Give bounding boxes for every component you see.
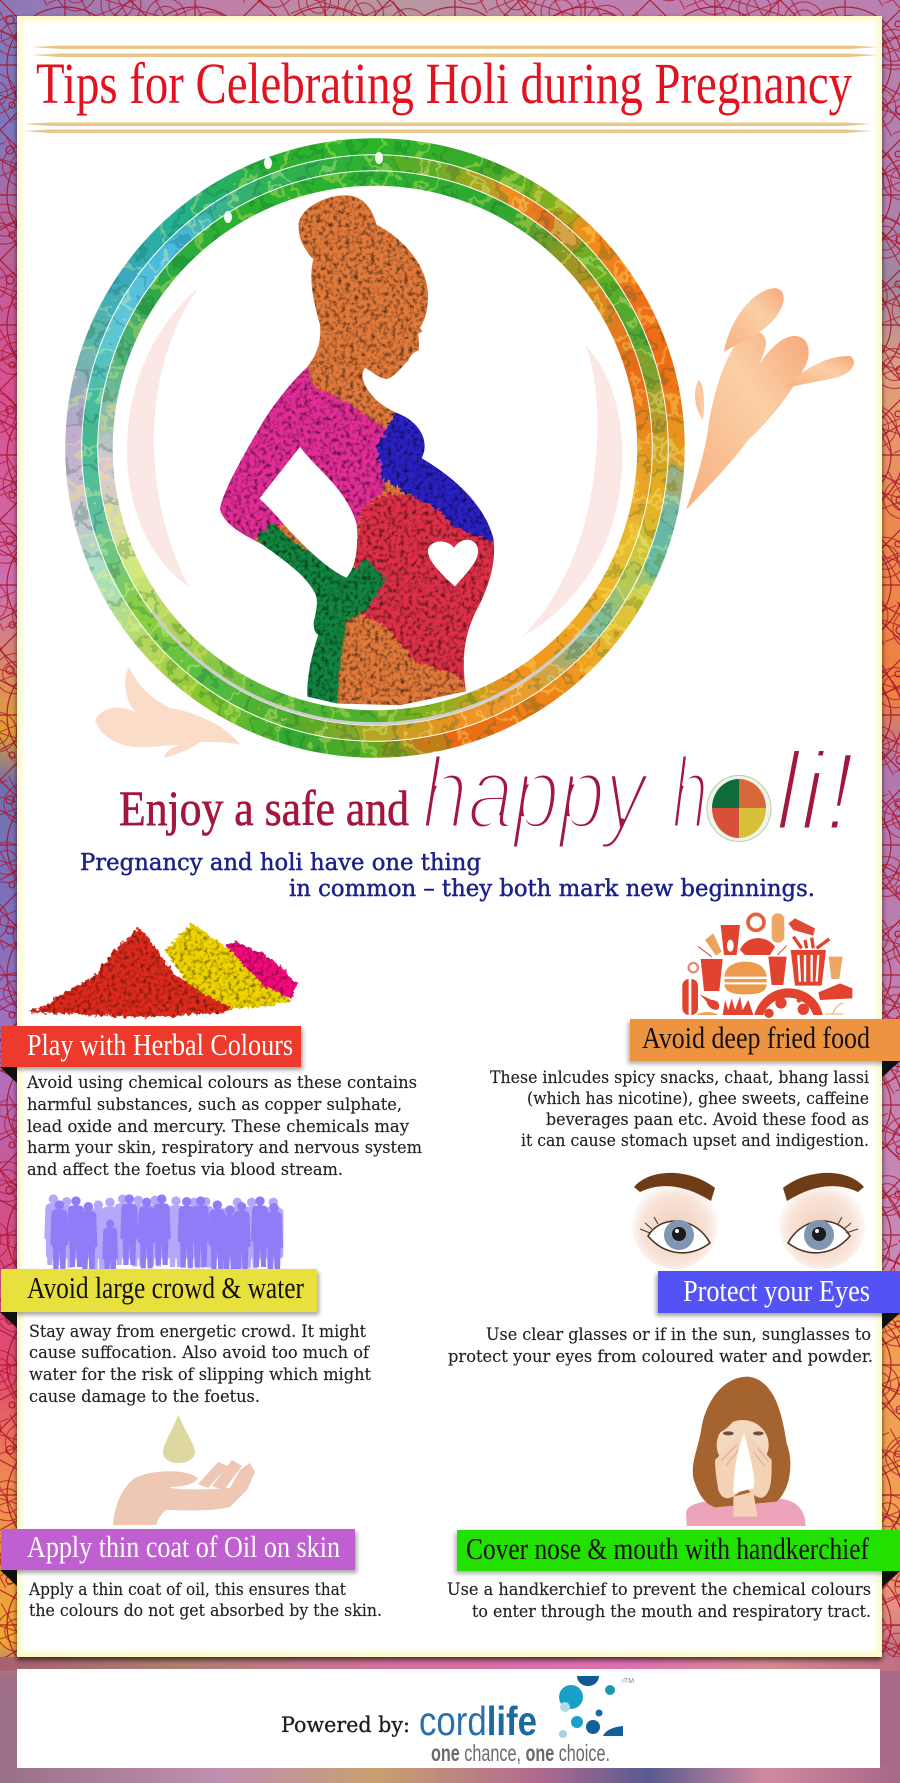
blue bump (377, 407, 500, 545)
description (448, 1325, 873, 1367)
icon: eyes (632, 1173, 865, 1269)
banner (1, 1529, 355, 1570)
description: beverages paan etc. Avoid these food as (546, 1110, 869, 1130)
description: cause suffocation. Also avoid too much of (29, 1343, 371, 1363)
pregnant woman silhouette in coloured powder (220, 195, 494, 706)
description: it can cause stomach upset and indigestion. (521, 1131, 869, 1151)
description: lead oxide and mercury. These chemicals may (27, 1117, 409, 1137)
pink arm and chest (220, 366, 387, 540)
peach splash bottom left (95, 667, 241, 758)
banner (457, 1530, 900, 1571)
slogan: Enjoy a safe and happy holi: happy (422, 736, 651, 850)
description (490, 1068, 870, 1151)
icon: cordlife dots logo (559, 1676, 634, 1738)
tip 4: protect eyes: Protect your Eyes (683, 1273, 870, 1308)
description: Stay away from energetic crowd. It might (29, 1322, 366, 1342)
tip 5: oil on skin: Apply thin coat of Oil on skin (27, 1529, 340, 1564)
banner (1, 1269, 317, 1312)
subheading: Pregnancy and holi have one thing (80, 850, 481, 876)
footer white panel (17, 1669, 880, 1768)
description: Use clear glasses or if in the sun, sunglasses to (486, 1325, 871, 1345)
green hand and leg (257, 523, 385, 710)
description (26, 1073, 422, 1180)
red belly (353, 492, 494, 690)
tip 3: large crowd (0, 1194, 371, 1407)
icon: powder piles (29, 923, 297, 1018)
tip 1: herbal colours: Play with Herbal Colours (27, 1027, 293, 1062)
icon: hand with oil drop (113, 1415, 255, 1525)
description: These inlcudes spicy snacks, chaat, bhang lassi (490, 1068, 870, 1088)
tip 2: deep fried food (490, 913, 900, 1151)
pale pink crescents inside ring (127, 288, 622, 637)
icon: holi colour plate as letter o (707, 776, 771, 842)
slogan: Enjoy a safe and happy holi (119, 729, 855, 854)
description (28, 1580, 382, 1621)
banner (658, 1271, 900, 1313)
description: the colours do not get absorbed by the skin. (29, 1601, 382, 1621)
description: cause damage to the foetus. (29, 1387, 260, 1407)
description: Apply a thin coat of oil, this ensures that (28, 1580, 346, 1600)
icon: cordlife dots logo: TM (624, 1678, 634, 1685)
description: Use a handkerchief to prevent the chemical colours (447, 1580, 871, 1600)
description: Avoid using chemical colours as these contains (26, 1073, 417, 1093)
orange splash right (686, 288, 854, 510)
slogan: Enjoy a safe and happy holi: Enjoy a safe and (119, 780, 409, 836)
ring details: grey inner edge and sparkles (152, 152, 598, 724)
tip 5: oil on skin (0, 1415, 382, 1621)
icon: woman with handkerchief (686, 1377, 806, 1526)
description: to enter through the mouth and respiratory tract. (472, 1602, 871, 1622)
description: (which has nicotine), ghee sweets, caffeine (527, 1089, 869, 1109)
description: harm your skin, respiratory and nervous system (27, 1138, 422, 1158)
banner (1, 1026, 301, 1067)
tip 1: herbal colours (0, 923, 422, 1180)
slogan: Enjoy a safe and happy holi: li! (775, 729, 855, 854)
description: water for the risk of slipping which might (29, 1365, 371, 1385)
footer: powered by cordlife: Powered by: (281, 1713, 410, 1737)
tip 3: large crowd: Avoid large crowd & water (27, 1270, 305, 1305)
tip 6: cover nose and mouth (447, 1377, 900, 1622)
colour powder ring (65, 138, 685, 758)
icon: fast food collage (682, 913, 852, 1018)
subheading: in common – they both mark new beginnings. (289, 876, 815, 902)
description (29, 1322, 371, 1407)
icon: crowd silhouette (44, 1194, 283, 1282)
description: harmful substances, such as copper sulphate, (27, 1095, 402, 1115)
banner (630, 1019, 900, 1061)
description: and affect the foetus via blood stream. (27, 1160, 343, 1180)
tip 4: protect eyes (448, 1173, 900, 1367)
footer: powered by cordlife (281, 1676, 634, 1766)
description (447, 1580, 871, 1622)
logo wordmark: cordlife (419, 1698, 537, 1744)
description: protect your eyes from coloured water and powder. (448, 1347, 873, 1367)
subheading (80, 850, 815, 902)
logo tagline: one chance, one choice. (431, 1740, 610, 1766)
slogan: Enjoy a safe and happy holi: h (672, 736, 708, 850)
